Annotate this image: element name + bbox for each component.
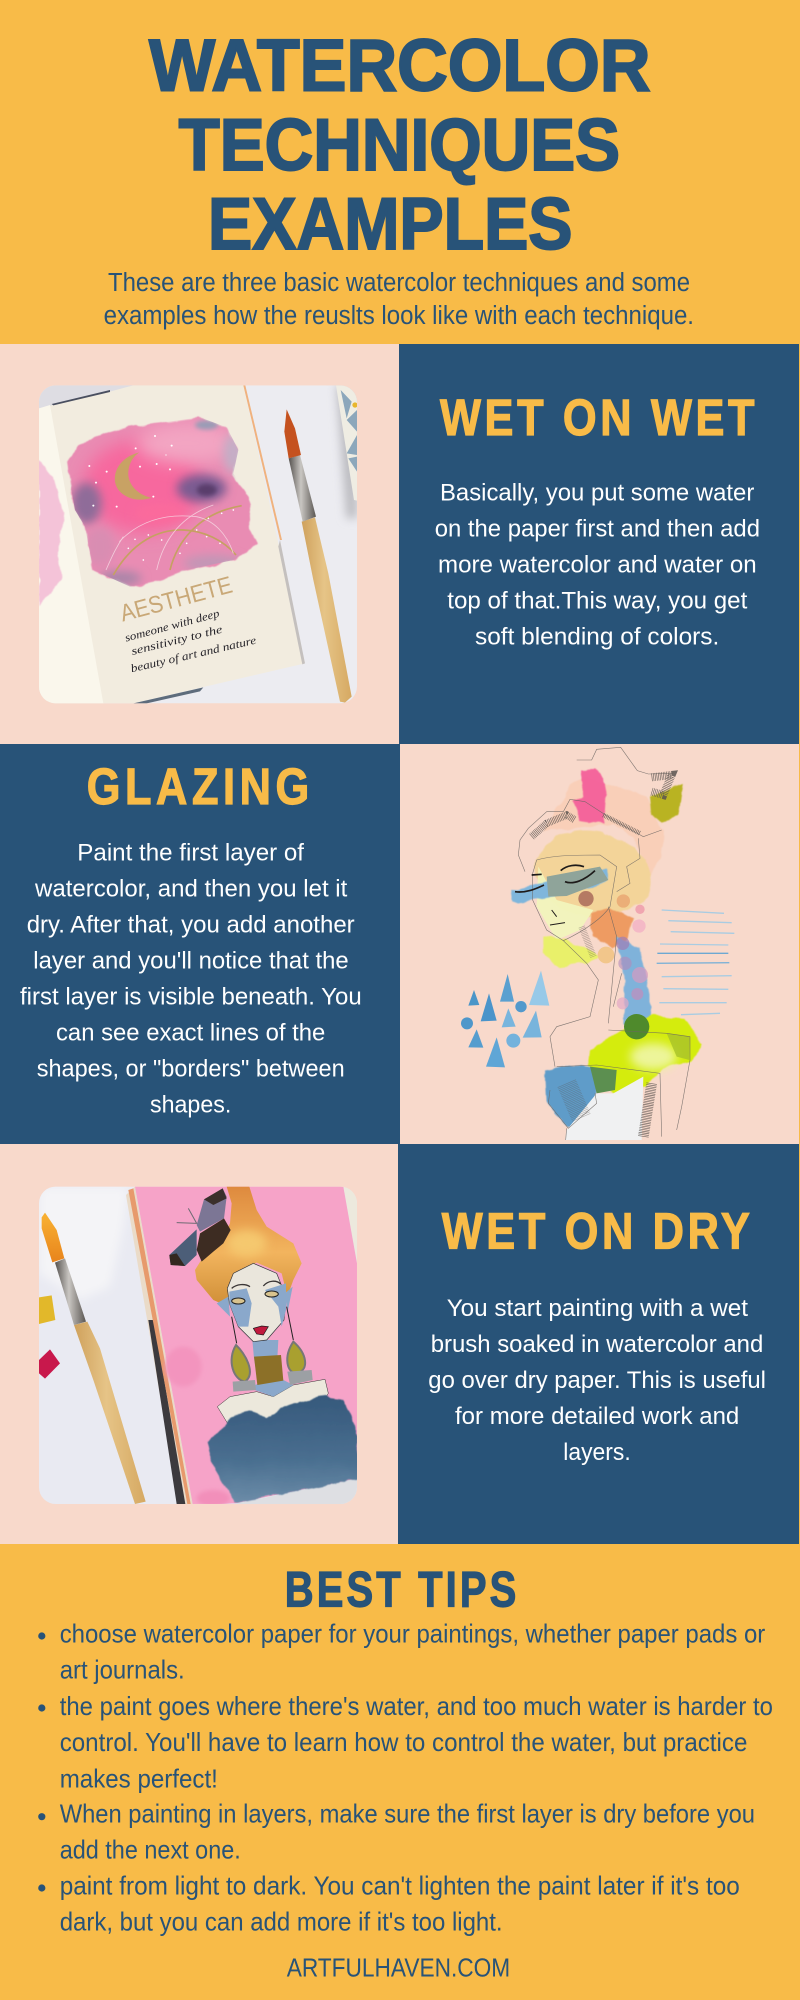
footer url: ARTFULHAVEN.COM xyxy=(287,1953,510,1983)
heading: wet on dry: WET ON DRY xyxy=(442,1203,753,1260)
blue triangles xyxy=(461,971,549,1067)
butterfly xyxy=(169,1188,231,1266)
panel: wet on dry text xyxy=(398,1144,799,1544)
page edges xyxy=(126,1187,193,1504)
body: glazing: Paint the first layer of xyxy=(77,840,304,867)
shoulders xyxy=(217,1379,329,1424)
heading: glazing: GLAZING xyxy=(87,759,314,816)
body: glazing: first layer is visible beneath. You xyxy=(20,984,362,1011)
heading: wet on wet: WET ON WET xyxy=(440,390,758,447)
panel: wet on dry image xyxy=(0,1144,398,1544)
brush xyxy=(302,517,352,703)
image: aesthete journal painting: beauty of art and nature xyxy=(130,635,257,675)
body: glazing: watercolor, and then you let it xyxy=(34,876,347,903)
neck xyxy=(250,1340,293,1397)
panel: wet on wet text xyxy=(399,344,799,744)
gold arcs xyxy=(113,506,242,575)
brush xyxy=(74,1322,146,1504)
pink watercolor blob xyxy=(67,417,258,587)
body: glazing: dry. After that, you add another xyxy=(27,912,355,939)
eyes and face details xyxy=(515,865,595,925)
body: wet on wet: soft blending of colors. xyxy=(475,624,719,651)
body: wet on dry: go over dry paper. This is useful xyxy=(428,1367,766,1394)
tip 4 xyxy=(38,1871,740,1937)
tip 3: add the next one. xyxy=(60,1835,241,1865)
body: wet on dry: You start painting with a wet xyxy=(447,1295,748,1322)
hair xyxy=(195,1187,302,1307)
panel: glazing text xyxy=(0,744,400,1144)
sketchbook pages xyxy=(39,385,305,703)
tip 2: control. You'll have to learn how to control the water, but practice xyxy=(60,1727,747,1757)
intro text: These are three basic watercolor techniques and some xyxy=(108,269,690,297)
tip 3: When painting in layers, make sure the first layer is dry before you xyxy=(60,1799,755,1829)
body: wet on dry: for more detailed work and xyxy=(455,1403,739,1430)
tip 4: dark, but you can add more if it's too light. xyxy=(60,1907,503,1937)
body: glazing: shapes, or "borders" between xyxy=(37,1056,345,1083)
lettering: AESTHETE xyxy=(117,572,235,627)
body: wet on wet xyxy=(435,480,760,651)
header panel xyxy=(0,0,800,344)
body: glazing: shapes. xyxy=(150,1092,231,1119)
title: TECHNIQUES xyxy=(179,105,620,186)
body: wet on dry xyxy=(428,1295,766,1466)
crescent moon xyxy=(115,452,152,500)
tip 2: makes perfect! xyxy=(60,1763,218,1793)
tip 1: art journals. xyxy=(60,1655,185,1685)
body: glazing: layer and you'll notice that the xyxy=(33,948,349,975)
neck wash xyxy=(590,908,632,948)
intro text xyxy=(104,269,694,330)
stars xyxy=(88,435,234,561)
left page pink wash xyxy=(39,460,63,607)
lime wash xyxy=(588,1015,702,1093)
paint pans xyxy=(39,1295,55,1324)
face xyxy=(227,1263,286,1342)
patterned tile xyxy=(336,385,357,501)
book shadow xyxy=(235,1478,357,1504)
tip 1 xyxy=(38,1619,766,1685)
tip 4: paint from light to dark. You can't lighten the paint later if it's too xyxy=(60,1871,740,1901)
body: wet on dry: brush soaked in watercolor and xyxy=(431,1331,763,1358)
body: wet on wet: top of that.This way, you get xyxy=(447,588,747,615)
hair wash xyxy=(543,777,663,877)
title: WATERCOLOR xyxy=(149,26,650,106)
features xyxy=(232,1281,281,1288)
body: wet on wet: on the paper first and then add xyxy=(435,516,760,543)
body: glazing xyxy=(20,840,362,1119)
image: aesthete journal painting: sensitivity to the xyxy=(130,624,224,658)
blue neck strip xyxy=(617,937,650,1023)
panel: wet on wet image xyxy=(0,344,399,744)
body: wet on wet: more watercolor and water on xyxy=(438,552,757,579)
blue dress xyxy=(207,1397,358,1503)
tip 2 xyxy=(38,1691,773,1793)
title: EXAMPLES xyxy=(208,184,572,265)
image: mixed media figure illustration xyxy=(461,747,734,1140)
earrings xyxy=(232,1307,313,1392)
blue stripes xyxy=(657,910,734,1015)
title xyxy=(149,26,650,265)
heading: best tips: BEST TIPS xyxy=(285,1561,519,1618)
choker xyxy=(254,1355,283,1385)
image: aesthete journal painting: someone with deep xyxy=(124,608,221,645)
body: glazing: can see exact lines of the xyxy=(56,1020,325,1047)
pink page xyxy=(135,1187,357,1504)
blue face band xyxy=(512,868,608,903)
tip 3 xyxy=(38,1799,755,1865)
sketch lines xyxy=(518,747,690,1140)
panel: best tips xyxy=(0,1544,800,2000)
panel: glazing image xyxy=(400,744,799,1144)
image: portrait with butterfly in sketchbook xyxy=(39,1187,358,1507)
hatching xyxy=(532,775,672,1137)
intro text: examples how the reuslts look like with each technique. xyxy=(104,302,694,330)
blue bodice wash xyxy=(545,1065,597,1128)
body: wet on dry: layers. xyxy=(563,1439,631,1466)
image: aesthete journal painting xyxy=(39,385,358,703)
body: wet on wet: Basically, you put some water xyxy=(440,480,754,507)
